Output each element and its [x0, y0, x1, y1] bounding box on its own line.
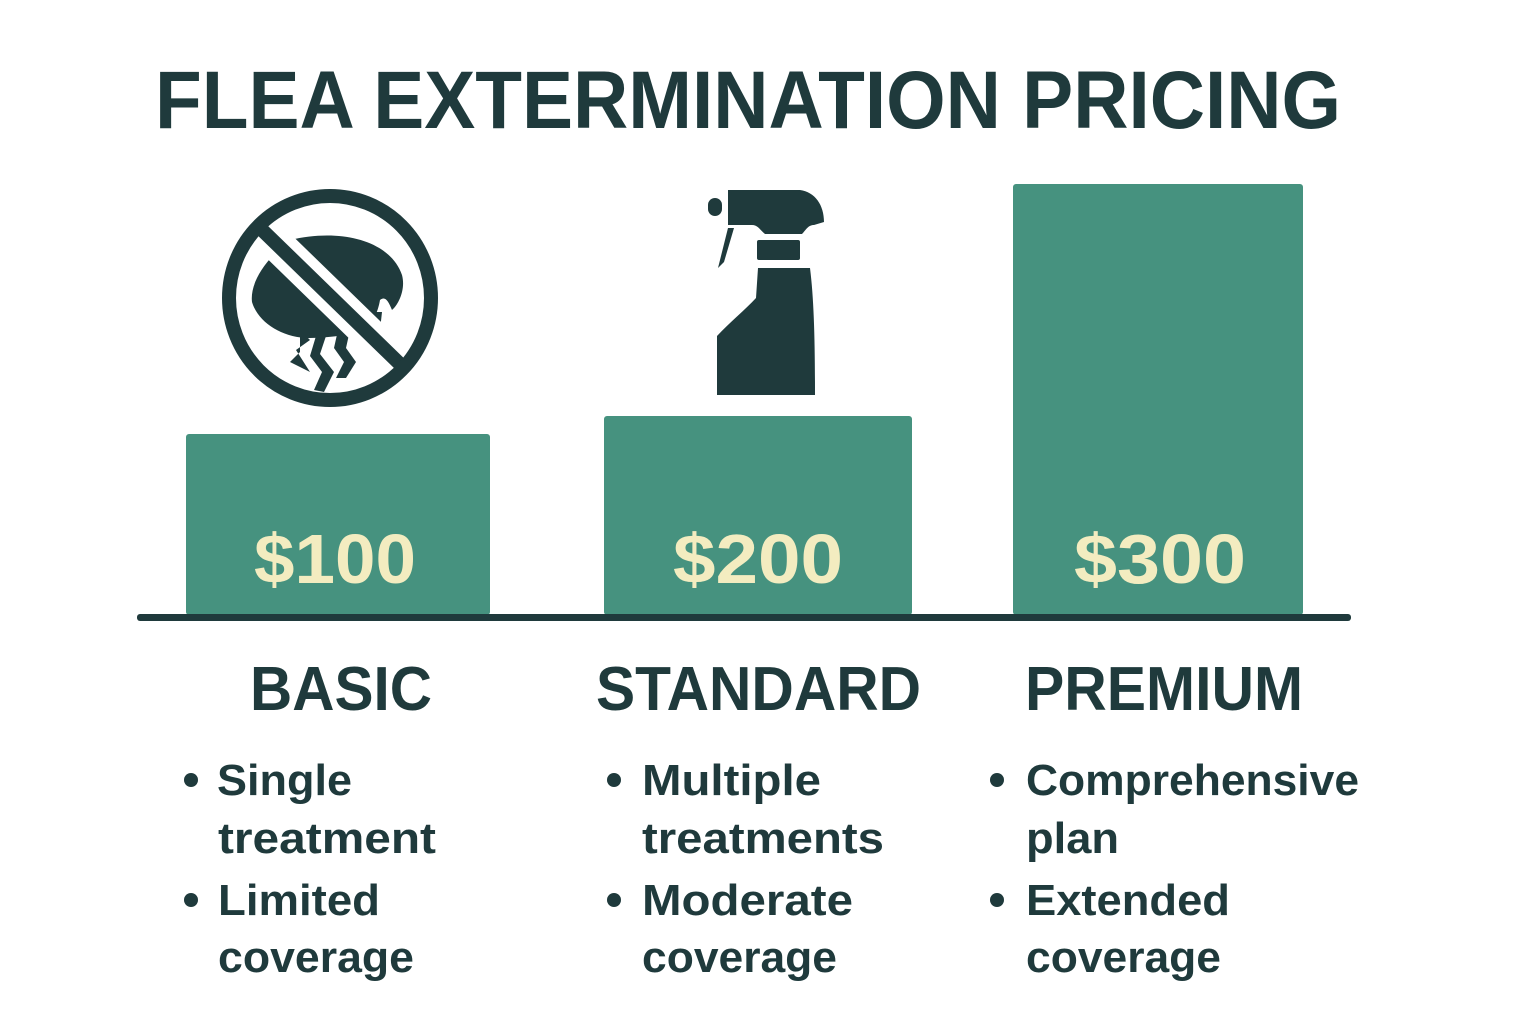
list: basic features — [184, 756, 436, 982]
title: FLEA EXTERMINATION PRICING — [155, 55, 1341, 146]
list: premium features: coverage — [1026, 933, 1221, 982]
list: standard features: Multiple — [642, 756, 821, 805]
label: basic: BASIC — [250, 655, 432, 724]
list: standard features: coverage — [642, 933, 837, 982]
list: basic features: Single — [217, 756, 352, 805]
bar: basic — [186, 434, 490, 615]
slash — [258, 226, 404, 368]
list: basic features: treatment — [218, 814, 436, 863]
flea body — [252, 235, 403, 392]
price: premium: $300 — [1074, 520, 1246, 598]
circle — [229, 196, 431, 400]
list: premium features — [990, 756, 1359, 982]
price: standard: $200 — [673, 520, 843, 598]
list: premium features: plan — [1026, 814, 1119, 863]
icon: no fleas — [229, 196, 431, 400]
label: standard: STANDARD — [596, 655, 921, 724]
list: premium features: Comprehensive — [1026, 756, 1359, 805]
list: standard features — [607, 756, 884, 982]
list: basic features: coverage — [218, 933, 414, 982]
icon: spray bottle — [708, 190, 824, 395]
bar: standard — [604, 416, 912, 615]
baseline — [137, 614, 1351, 621]
label: premium: PREMIUM — [1025, 655, 1303, 724]
list: standard features: Moderate — [642, 876, 853, 925]
list: standard features: treatments — [642, 814, 884, 863]
bar: premium — [1013, 184, 1303, 615]
bar chart — [137, 184, 1351, 621]
price: basic: $100 — [254, 520, 416, 598]
list: basic features: Limited — [218, 876, 380, 925]
list: premium features: Extended — [1026, 876, 1230, 925]
